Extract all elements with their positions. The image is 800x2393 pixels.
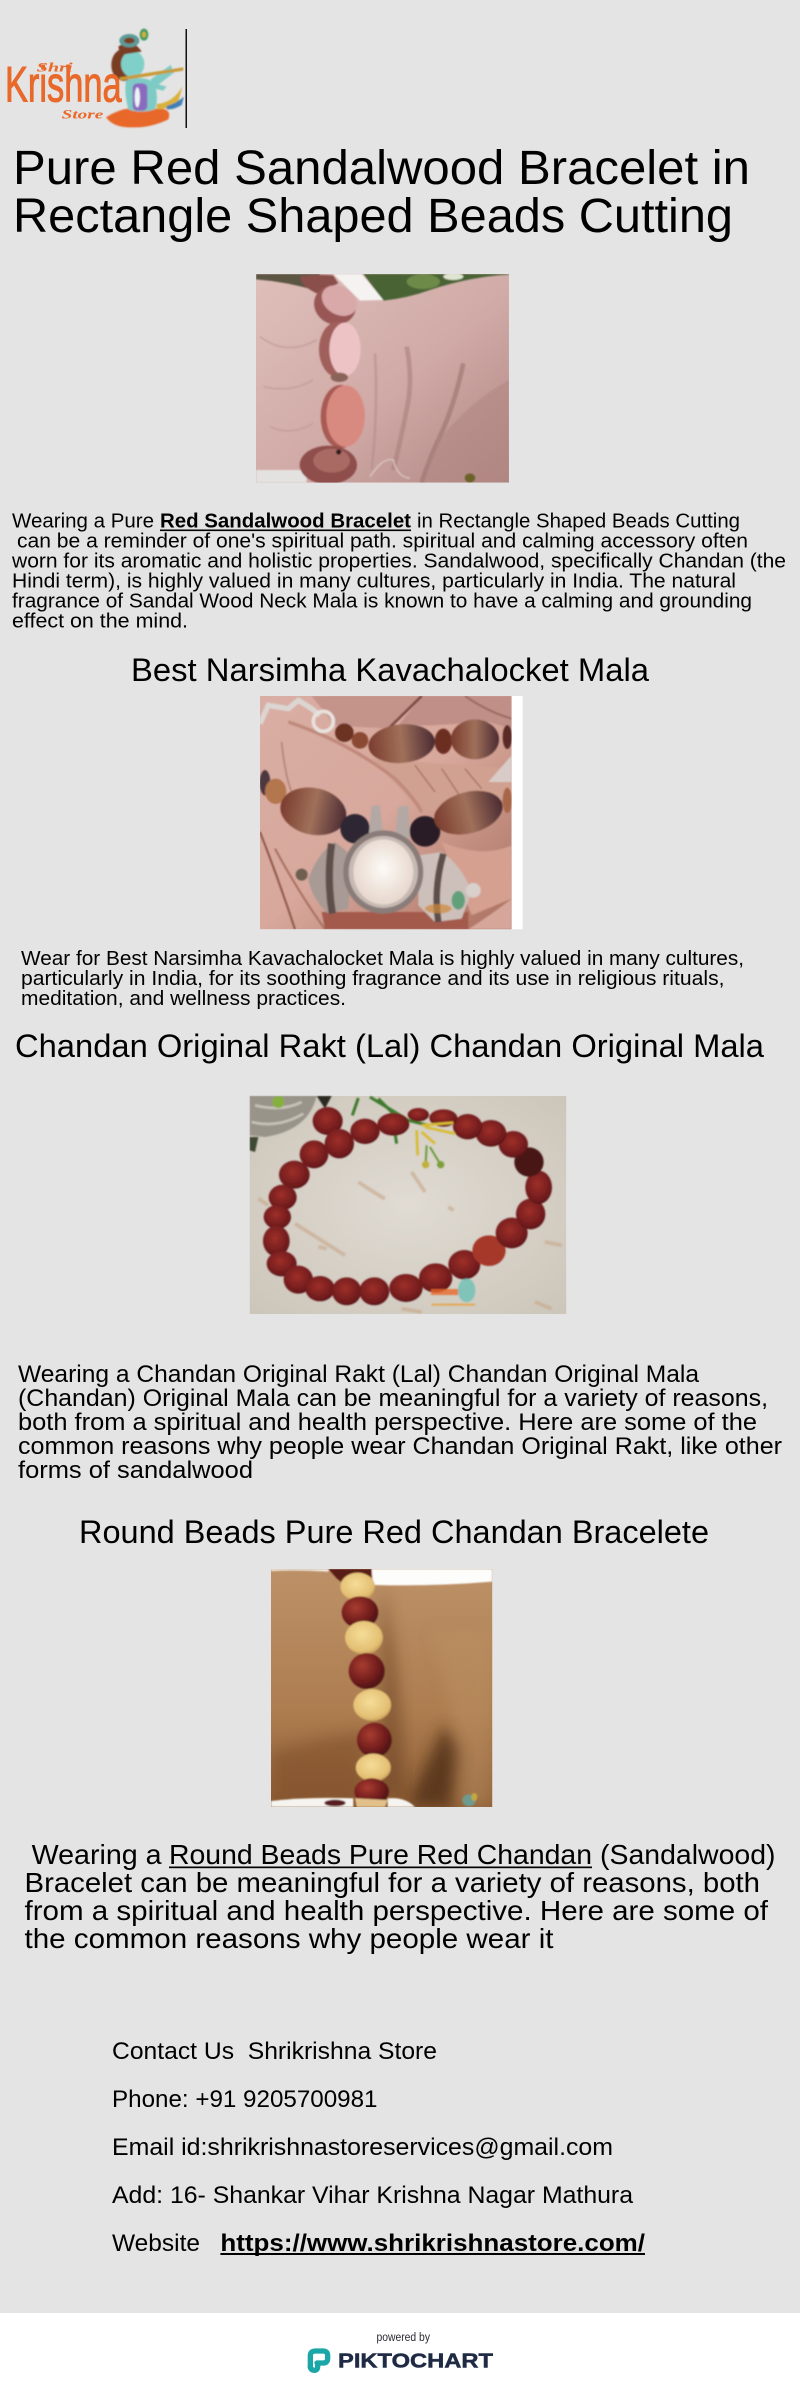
photo: Narsimha kavach locket mala bbox=[260, 696, 523, 929]
paragraph: Round Beads description: (Sandalwood) bbox=[600, 1839, 776, 1870]
paragraph: Narsimha kavach locket description bbox=[21, 948, 744, 1010]
paragraph: red sandalwood bracelet description: Wearing a Pure bbox=[12, 510, 154, 532]
photo: red sandalwood rectangle bead bracelet on wrist bbox=[256, 273, 509, 484]
title bbox=[13, 142, 750, 243]
heading: Round Beads Pure Red Chandan Bracelete: Round Beads Pure Red Chandan Bracelete bbox=[79, 1514, 709, 1550]
beads bbox=[300, 275, 338, 293]
paragraph: Round Beads description bbox=[24, 1839, 776, 1954]
footer: powered by Piktochart: powered by bbox=[376, 2332, 430, 2344]
title: Pure Red Sandalwood Bracelet in bbox=[13, 142, 750, 195]
footer: powered by Piktochart: PIKTOCHART bbox=[338, 2350, 493, 2372]
contact details: Phone: +91 9205700981 bbox=[112, 2086, 378, 2113]
paragraph: Narsimha kavach locket description: particularly in India, for its soothing fragrance and its use in religious rituals, bbox=[21, 968, 724, 990]
logo: Shri Krishna Store bbox=[5, 29, 184, 127]
paragraph: Chandan Original Rakt description: common reasons why people wear Chandan Original Rakt, like other bbox=[18, 1433, 782, 1460]
flowers bbox=[417, 1123, 455, 1155]
paragraph: red sandalwood bracelet description: fragrance of Sandal Wood Neck Mala is known to have a calming and grounding bbox=[12, 590, 752, 612]
logo wordmark: Shri bbox=[37, 61, 73, 75]
paragraph: Round Beads description: the common reasons why people wear it bbox=[24, 1923, 554, 1954]
paragraph: red sandalwood bracelet description: can be a reminder of one's spiritual path. spiritual and calming accessory often bbox=[17, 530, 748, 552]
logo wordmark bbox=[5, 57, 122, 121]
paragraph: red sandalwood bracelet description: in Rectangle Shaped Beads Cutting bbox=[417, 510, 740, 532]
paragraph: red sandalwood bracelet description: worn for its aromatic and holistic properties. Sandalwood, specifically Chandan (the bbox=[11, 550, 786, 572]
paragraph: Chandan Original Rakt description: Wearing a Chandan Original Rakt (Lal) Chandan Original Mala bbox=[18, 1361, 700, 1388]
contact details: https://www.shrikrishnastore.com/ bbox=[220, 2230, 645, 2257]
beads bbox=[328, 1569, 372, 1582]
paragraph: red sandalwood bracelet description: Red Sandalwood Bracelet bbox=[160, 510, 411, 532]
upper beads bbox=[335, 723, 354, 742]
logo divider line bbox=[186, 29, 187, 128]
paragraph: red sandalwood bracelet description: Hindi term), is highly valued in many cultures, particularly in India. The natural bbox=[12, 570, 736, 592]
heading: Chandan Original Rakt (Lal) Chandan Original Mala: Chandan Original Rakt (Lal) Chandan Original Mala bbox=[15, 1028, 764, 1064]
pendant body bbox=[308, 842, 352, 914]
plant sprig bbox=[352, 1097, 428, 1144]
paragraph: red sandalwood bracelet description bbox=[11, 510, 786, 632]
lower beads bbox=[260, 770, 270, 795]
contact details bbox=[112, 2038, 645, 2257]
contact details: Email id:shrikrishnastoreservices@gmail.com bbox=[112, 2134, 613, 2161]
watermark bbox=[430, 1288, 459, 1296]
paragraph: Chandan Original Rakt description bbox=[18, 1361, 782, 1484]
photo: round bead bracelet on wrist bbox=[271, 1569, 492, 1807]
logo wordmark: Store bbox=[62, 107, 104, 121]
paragraph: Narsimha kavach locket description: Wear for Best Narsimha Kavachalocket Mala is highly valued in many cultures, bbox=[21, 948, 744, 970]
contact details: Website bbox=[112, 2230, 200, 2257]
chain bbox=[260, 700, 320, 724]
paragraph: Round Beads description: Round Beads Pure Red Chandan bbox=[169, 1839, 592, 1870]
icon: Krishna figure bbox=[106, 29, 184, 127]
paragraph: Round Beads description: from a spiritual and health perspective. Here are some of bbox=[24, 1895, 768, 1926]
footer: powered by Piktochart bbox=[0, 2313, 800, 2393]
logo wordmark: Krishna bbox=[5, 57, 122, 113]
contact details: Contact Us Shrikrishna Store bbox=[112, 2038, 437, 2065]
icon: Piktochart mark bbox=[310, 2351, 328, 2370]
paragraph: Chandan Original Rakt description: forms of sandalwood bbox=[18, 1457, 253, 1484]
paragraph: Chandan Original Rakt description: both from a spiritual and health perspective. Here are some of the bbox=[18, 1409, 757, 1436]
beads bbox=[263, 1107, 552, 1305]
photo: Rakt chandan bead bracelet on marble bbox=[250, 1096, 566, 1314]
contact details: Add: 16- Shankar Vihar Krishna Nagar Mathura bbox=[112, 2182, 634, 2209]
heading: Best Narsimha Kavachalocket Mala: Best Narsimha Kavachalocket Mala bbox=[131, 652, 649, 688]
paragraph: Chandan Original Rakt description: (Chandan) Original Mala can be meaningful for a variety of reasons, bbox=[18, 1385, 768, 1412]
paragraph: Narsimha kavach locket description: meditation, and wellness practices. bbox=[21, 988, 346, 1010]
paragraph: Round Beads description: Wearing a bbox=[32, 1839, 162, 1870]
paragraph: red sandalwood bracelet description: effect on the mind. bbox=[12, 610, 188, 632]
title: Rectangle Shaped Beads Cutting bbox=[13, 190, 733, 243]
locket pearl bbox=[343, 830, 423, 914]
paragraph: Round Beads description: Bracelet can be meaningful for a variety of reasons, both bbox=[24, 1867, 760, 1898]
